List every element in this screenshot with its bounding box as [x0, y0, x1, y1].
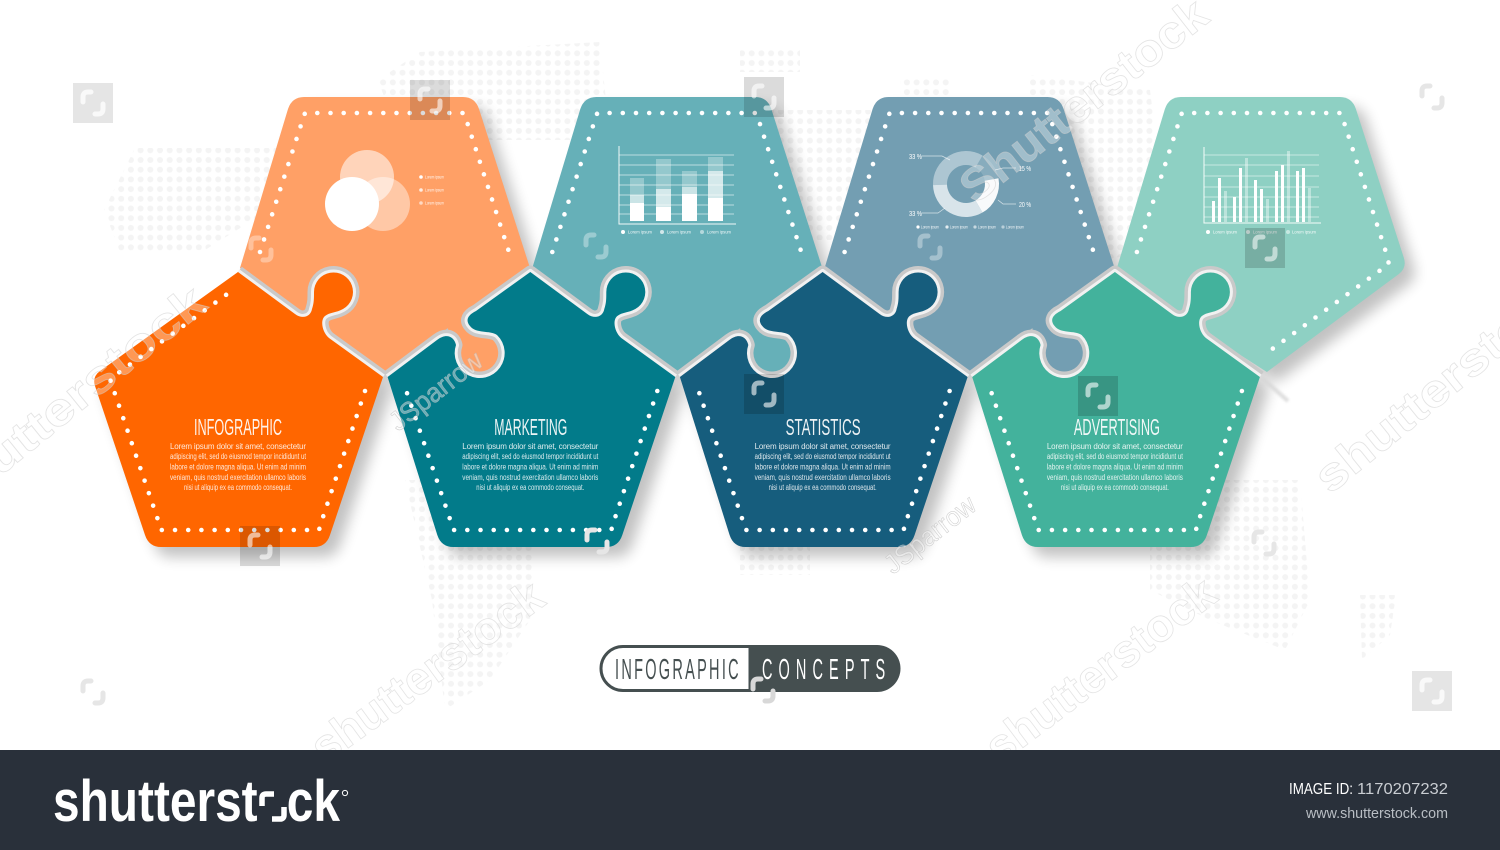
text block: statistics: Lorem ipsum dolor sit amet, consectetur — [755, 442, 891, 451]
text block: statistics: labore et dolore magna aliqua. Ut enim ad minim — [755, 462, 891, 472]
badge: infographic concepts: INFOGRAPHIC — [615, 652, 741, 685]
grouped bar chart: Lorem ipsum — [1213, 230, 1237, 234]
panel: advertising — [972, 272, 1260, 547]
donut chart: Lorem ipsum — [1006, 224, 1024, 230]
text block: statistics: nisi ut aliquip ex ea commodo consequat. — [769, 483, 877, 492]
panel: marketing — [388, 272, 675, 547]
heading: marketing: MARKETING — [494, 414, 567, 440]
stacked bar chart: Lorem ipsum — [628, 230, 652, 234]
panel: upper piece 3 — [825, 97, 1115, 375]
watermarks: shutterstock — [300, 569, 554, 773]
donut chart: 33 % — [909, 154, 922, 161]
text block: marketing: nisi ut aliquip ex ea commodo consequat. — [476, 483, 584, 492]
badge: infographic concepts — [601, 645, 900, 692]
text block: infographic — [170, 442, 307, 492]
text block: marketing — [462, 442, 599, 492]
panel: statistics — [680, 272, 968, 547]
text block: marketing: Lorem ipsum dolor sit amet, consectetur — [462, 442, 599, 451]
text block: statistics: adipiscing elit, sed do eiusmod tempor incididunt ut — [755, 452, 891, 461]
text block: marketing: veniam, quis nostrud exercitation ullamco laboris — [462, 473, 598, 482]
text block: marketing: labore et dolore magna aliqua. Ut enim ad minim — [462, 462, 599, 472]
donut chart — [909, 154, 1031, 230]
grouped bar chart — [1204, 147, 1321, 234]
text block: infographic: adipiscing elit, sed do eiusmod tempor incididunt ut — [170, 452, 307, 461]
venn diagram: Lorem ipsum — [425, 188, 444, 192]
text block: infographic: veniam, quis nostrud exercitation ullamco laboris — [170, 473, 306, 482]
footer logo: shutterstock — [53, 769, 341, 834]
venn diagram: Lorem ipsum — [425, 200, 444, 206]
venn diagram — [325, 150, 444, 231]
text block: advertising: nisi ut aliquip ex ea commodo consequat. — [1061, 483, 1169, 492]
donut chart: 33 % — [909, 211, 922, 218]
text block: infographic: Lorem ipsum dolor sit amet, consectetur — [170, 442, 306, 451]
text block: infographic: nisi ut aliquip ex ea commodo consequat. — [184, 483, 292, 492]
donut chart: 20 % — [1019, 202, 1031, 209]
donut chart: Lorem ipsum — [950, 224, 968, 230]
dotted world map — [104, 42, 1396, 710]
heading: advertising: ADVERTISING — [1074, 414, 1160, 440]
footer bar — [0, 750, 1500, 850]
image id: IMAGE ID: — [1289, 781, 1353, 798]
heading: statistics: STATISTICS — [786, 414, 861, 440]
heading: infographic: INFOGRAPHIC — [194, 414, 282, 440]
panel: upper piece 2 — [532, 97, 822, 375]
website: www.shutterstock.com — [1305, 805, 1448, 822]
image number: 1170207232 — [1357, 781, 1448, 798]
text block: advertising: labore et dolore magna aliqua. Ut enim ad minim — [1047, 462, 1183, 472]
text block: statistics — [755, 442, 891, 492]
panel: upper piece 1 — [240, 97, 530, 375]
stacked bar chart — [619, 146, 736, 234]
venn diagram: Lorem ipsum — [425, 174, 444, 180]
watermarks: Shutterstock — [949, 0, 1218, 213]
donut chart: 15 % — [1019, 166, 1031, 173]
text block: infographic: labore et dolore magna aliqua. Ut enim ad minim — [170, 462, 306, 472]
drop shadows — [104, 107, 1415, 557]
text block: advertising: Lorem ipsum dolor sit amet, consectetur — [1047, 442, 1183, 451]
text block: statistics: veniam, quis nostrud exercitation ullamco laboris — [755, 473, 891, 482]
watermarks: JSparrow — [383, 345, 489, 437]
donut chart: Lorem ipsum — [921, 224, 939, 230]
badge: infographic concepts: CONCEPTS — [762, 652, 891, 685]
stacked bar chart: Lorem ipsum — [667, 230, 691, 234]
grouped bar chart: Lorem ipsum — [1292, 230, 1316, 234]
text block: marketing: adipiscing elit, sed do eiusmod tempor incididunt ut — [462, 452, 599, 461]
shadow streak at end of last piece — [1262, 378, 1288, 401]
text block: advertising — [1047, 442, 1183, 492]
donut chart: Lorem ipsum — [978, 224, 996, 230]
text block: advertising: adipiscing elit, sed do eiusmod tempor incididunt ut — [1047, 452, 1183, 461]
stacked bar chart: Lorem ipsum — [707, 230, 731, 234]
text block: advertising: veniam, quis nostrud exercitation ullamco laboris — [1047, 473, 1183, 482]
grouped bar chart: Lorem ipsum — [1253, 230, 1277, 234]
panel: upper piece 4 — [1117, 97, 1405, 372]
watermarks: shutterstock — [975, 566, 1226, 773]
watermarks: JSparrow — [878, 489, 982, 580]
panel: infographic — [94, 272, 383, 547]
